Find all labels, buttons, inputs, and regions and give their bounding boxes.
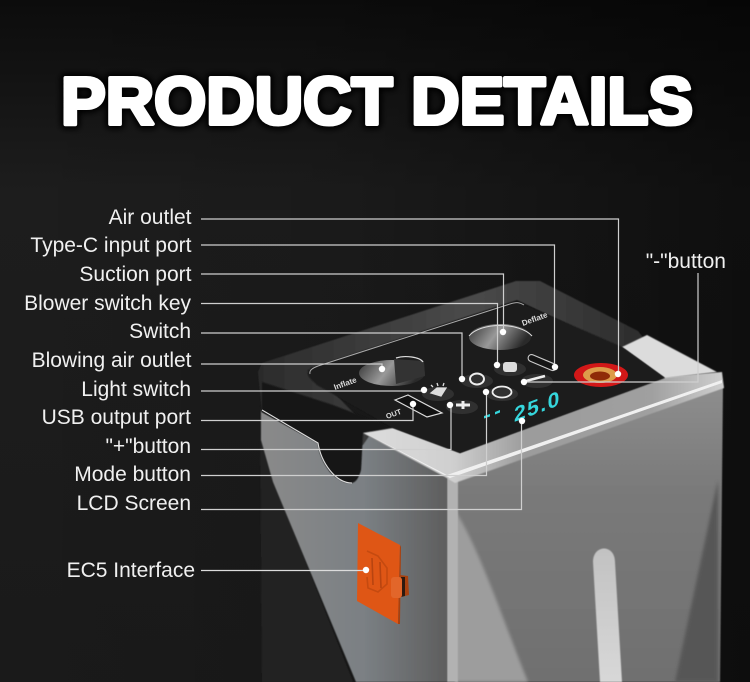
leader line: Blowing air outlet (201, 364, 385, 372)
leader line: Suction port (201, 274, 506, 335)
leader line: Air outlet (201, 219, 621, 377)
title: PRODUCT DETAILS (61, 64, 693, 139)
icon: power switch (470, 374, 484, 384)
product: inflator pump device (258, 281, 724, 682)
panel small text: Inflate (333, 375, 358, 392)
suction port (469, 324, 532, 350)
notch white edge (262, 410, 352, 483)
black control panel (308, 303, 665, 453)
white right corner block (622, 335, 717, 378)
callout labels: Mode button (74, 463, 191, 486)
icon: blower key (503, 362, 517, 372)
product: inflator pump device: OUT (385, 407, 403, 421)
LCD display: 25.0 (514, 385, 561, 427)
rim highlight (367, 380, 722, 478)
callout labels: "-"button (646, 250, 726, 273)
right face dark wedge (675, 480, 718, 682)
front corner strip (447, 478, 458, 682)
product: inflator pump device: Deflate (521, 310, 549, 328)
icon: mode ring (492, 386, 512, 398)
callout labels: Blower switch key (24, 292, 191, 315)
front rim (363, 372, 724, 483)
button bases (422, 362, 553, 414)
left face (261, 411, 447, 682)
icon: type-C port (527, 353, 557, 372)
LCD display (484, 385, 561, 427)
callout labels: Air outlet (109, 206, 192, 229)
icon: light (431, 383, 446, 396)
leader line: LCD Screen (201, 418, 525, 510)
orange EC5 cover (357, 523, 409, 624)
left dark side strip (260, 405, 353, 682)
right face (455, 385, 723, 682)
slot light strip (593, 548, 622, 682)
red air outlet (574, 363, 628, 387)
leader line: Type-C input port (201, 245, 558, 370)
leader line: EC5 Interface (201, 567, 369, 573)
leader line: minus button (521, 273, 698, 385)
panel outline (310, 303, 524, 374)
leader line: Blower switch key (201, 304, 500, 368)
callout labels (24, 206, 726, 582)
lid rim (258, 281, 645, 445)
leader line: Light switch (201, 387, 427, 393)
blowing air outlet port (359, 357, 425, 386)
callout labels: LCD Screen (77, 492, 191, 515)
right face light wedge (456, 512, 528, 682)
leader line: plus button (201, 402, 453, 450)
callout labels: Type-C input port (30, 234, 192, 257)
callout labels: Light switch (81, 378, 191, 401)
leader line: Mode button (201, 389, 489, 476)
callout labels: EC5 Interface (67, 559, 195, 582)
icon: plus button (456, 401, 470, 409)
icon: minus button (526, 376, 545, 381)
icon: USB port (395, 395, 442, 417)
dark under-lid recess (262, 382, 393, 481)
title: PRODUCT DETAILS (61, 64, 693, 139)
callout labels: "+"button (105, 435, 191, 458)
callout labels: Switch (129, 320, 191, 343)
callout labels: USB output port (42, 406, 191, 429)
callout labels: Suction port (79, 263, 192, 286)
callout labels: Blowing air outlet (32, 349, 192, 372)
leader line: Switch (201, 333, 465, 382)
leader line: USB output port (201, 401, 416, 420)
